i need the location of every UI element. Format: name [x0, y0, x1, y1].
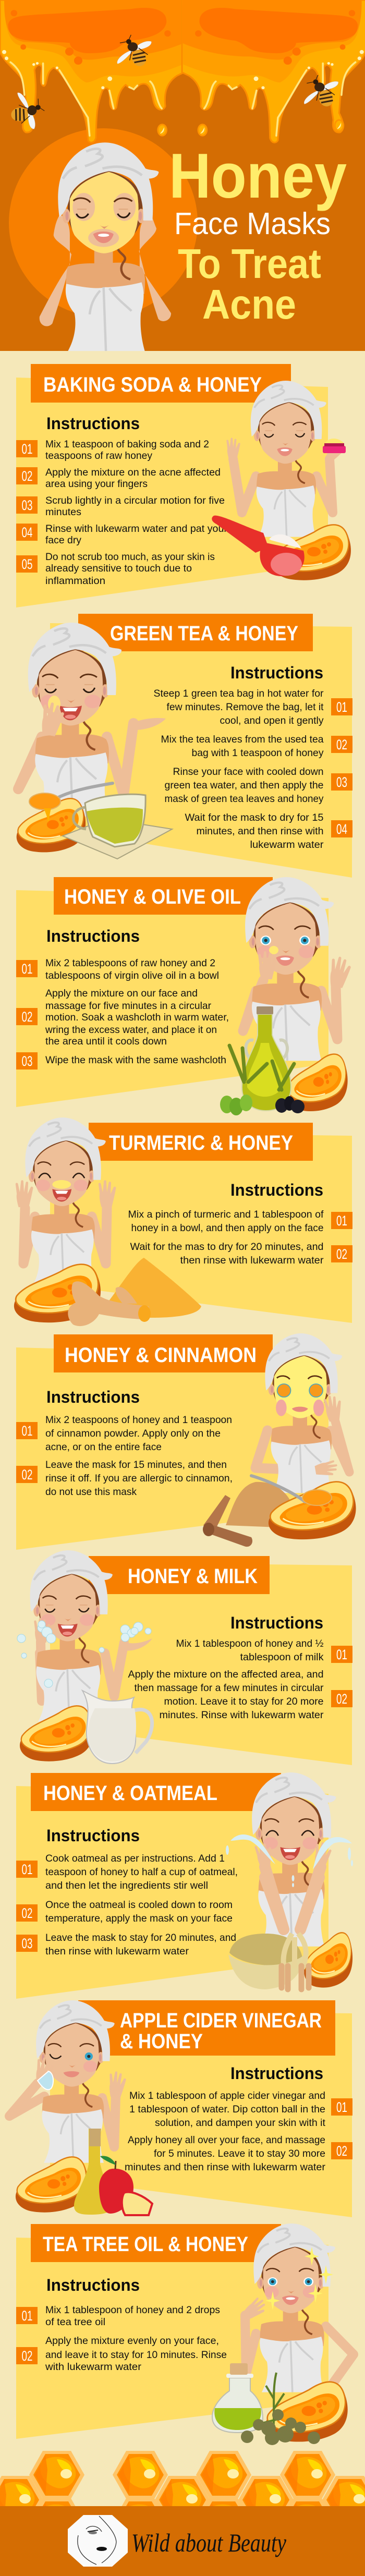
woman with orange slices on eyes	[256, 1333, 349, 1493]
instructions label: Instructions	[46, 1826, 140, 1845]
step 03	[16, 1052, 226, 1070]
step 01	[16, 1414, 232, 1453]
step 01: Mix 1 tablespoon of honey and 2 drops	[45, 2304, 220, 2316]
step 02: motion. Leave it to stay for 20 more	[164, 1696, 323, 1707]
step 02: 02	[336, 737, 347, 752]
title: Face Masks	[174, 206, 331, 241]
step 01: 1 tablespoon of water. Dip cotton ball in the	[129, 2104, 325, 2115]
oatmeal bowl and oat ears	[228, 1934, 309, 1989]
title: Acne	[202, 281, 296, 327]
vinegar bottle and apple	[74, 2129, 152, 2215]
step 04: lukewarm water	[250, 839, 324, 850]
step 02: Apply the mixture evenly on your face,	[45, 2335, 219, 2347]
step 02: 02	[22, 468, 32, 484]
instructions label: Instructions	[46, 927, 140, 945]
step 01: of cinnamon powder. Apply only on the	[45, 1428, 221, 1439]
step 03: minutes	[45, 506, 81, 518]
step 02: then rinse with lukewarm water	[180, 1255, 324, 1266]
step 02: 02	[336, 1246, 347, 1262]
step 04	[16, 523, 227, 546]
red scoop with baking soda	[212, 516, 305, 576]
olive oil bottle with olives	[220, 1006, 305, 1115]
panel: honey and milk	[17, 1550, 352, 1765]
heading: APPLE CIDER VINEGAR	[120, 2009, 322, 2032]
step 04: 04	[22, 525, 32, 540]
instructions label: Instructions	[46, 2276, 140, 2294]
step 04: minutes, and then rinse with	[196, 825, 323, 837]
honey on bread	[286, 1054, 348, 1111]
step 01	[16, 2304, 220, 2328]
heading: HONEY & OLIVE OIL	[64, 885, 241, 908]
heading: GREEN TEA & HONEY	[110, 622, 298, 645]
cinnamon powder and sticks	[203, 1482, 292, 1547]
panel: green tea and honey	[17, 614, 352, 878]
step 02: do not use this mask	[45, 1486, 137, 1498]
step 03: 03	[22, 1053, 32, 1069]
step 01	[16, 439, 209, 461]
step 01: Mix 2 tablespoons of raw honey and 2	[45, 957, 215, 969]
woman touching cheek	[243, 877, 352, 1061]
footer	[0, 2506, 365, 2576]
step 01: Mix 1 teaspoon of baking soda and 2	[45, 439, 209, 450]
step 01: Mix 1 tablespoon of apple cider vinegar and	[129, 2090, 325, 2101]
woman wiping eye with cotton pad	[9, 2000, 127, 2163]
heading: HONEY & CINNAMON	[65, 1344, 257, 1367]
step 01: honey in a bowl, and then apply on the face	[131, 1222, 323, 1234]
hero header	[0, 0, 365, 351]
woman applying honey	[18, 623, 166, 817]
step 01: 01	[336, 699, 347, 715]
step 02: 02	[22, 2348, 32, 2364]
woman splashing water	[226, 1772, 353, 1947]
step 02: minutes and then rinse with lukewarm water	[125, 2161, 326, 2173]
panel: apple cider vinegar and honey	[9, 2000, 352, 2217]
step 01: 01	[22, 1423, 32, 1439]
honey on bread	[266, 2382, 348, 2442]
step 02: then massage for a few minutes in circular	[135, 1682, 324, 1694]
step 02: Leave the mask for 15 minutes, and then	[45, 1459, 227, 1471]
honey on bread	[304, 1933, 352, 1988]
tea tree oil flask with berries	[212, 2363, 320, 2445]
step 02: 02	[22, 1905, 32, 1921]
step 02: area using your fingers	[45, 478, 148, 490]
step 01: 01	[22, 2308, 32, 2324]
panel: tea tree oil and honey	[16, 2223, 354, 2445]
step 01: 01	[336, 1213, 347, 1229]
step 01: 01	[22, 961, 32, 977]
step 01: teaspoons of raw honey	[45, 450, 152, 461]
milk jug	[82, 1691, 152, 1764]
step 01	[129, 2090, 352, 2129]
honey on bread with spoon	[251, 1476, 356, 1539]
step 03: green tea water, and then apply the	[165, 780, 323, 791]
step 01: Mix 2 teaspoons of honey and 1 teaspoon	[45, 1414, 232, 1426]
step 02: 02	[22, 1467, 32, 1483]
step 02: 02	[336, 2143, 347, 2159]
step 05: Do not scrub too much, as your skin is	[45, 551, 215, 563]
step 02	[161, 734, 352, 759]
background circle	[9, 128, 198, 317]
title: To Treat	[178, 240, 321, 287]
panel: baking soda and honey	[16, 364, 351, 607]
step 01: Mix 1 tablespoon of honey and ½	[176, 1638, 323, 1649]
step 02: for 5 minutes. Leave it to stay 30 more	[154, 2148, 325, 2159]
honey on bread	[16, 2157, 88, 2213]
step 01: solution, and dampen your skin with it	[155, 2117, 326, 2129]
step 01: cool, and open it gently	[220, 715, 324, 726]
step 02: massage for five minutes in a circular	[45, 1000, 211, 1012]
step 02	[16, 467, 221, 490]
panel: honey and oatmeal	[16, 1772, 353, 1999]
instructions label: Instructions	[46, 1388, 140, 1406]
step 04: Rinse with lukewarm water and pat your	[45, 523, 227, 534]
instructions label: Instructions	[46, 414, 140, 433]
step 03: Scrub lightly in a circular motion for five	[45, 495, 225, 506]
woman holding cream jar	[226, 381, 347, 537]
step 03: 03	[336, 774, 347, 790]
brand name: Wild about Beauty	[131, 2528, 287, 2557]
heading: TURMERIC & HONEY	[109, 1132, 293, 1155]
step 03: Leave the mask to stay for 20 minutes, and	[45, 1932, 236, 1943]
step 01	[16, 1853, 238, 1891]
step 02: Apply the mixture on the acne affected	[45, 467, 221, 478]
step 02	[16, 1899, 233, 1924]
step 01	[176, 1638, 352, 1663]
step 02: Apply the mixture on our face and	[45, 988, 198, 999]
heading: & HONEY	[120, 2030, 203, 2053]
step 03: 03	[22, 497, 32, 513]
step 05: inflammation	[45, 575, 105, 587]
title: Honey	[169, 140, 347, 211]
step 03: 03	[22, 1936, 32, 1951]
step 03	[16, 495, 225, 518]
step 02	[16, 2335, 227, 2373]
step 01: tablespoon of milk	[240, 1651, 324, 1663]
step 03: Rinse your face with cooled down	[173, 766, 323, 777]
step 05: already sensitive to touch due to	[45, 563, 192, 574]
heading: HONEY & OATMEAL	[43, 1782, 217, 1805]
step 02: Wait for the mas to dry for 20 minutes, and	[130, 1241, 323, 1253]
step 02: Apply the mixture on the affected area, and	[128, 1669, 323, 1680]
step 04: Wait for the mask to dry for 15	[185, 812, 324, 823]
step 02: Apply honey all over your face, and massage	[128, 2134, 325, 2146]
woman with foam bubbles	[17, 1550, 152, 1721]
heading: BAKING SODA & HONEY	[43, 373, 262, 396]
step 04: 04	[336, 821, 347, 837]
step 01: Cook oatmeal as per instructions. Add 1	[45, 1853, 225, 1864]
honeycomb strip	[0, 2451, 365, 2546]
step 01: teaspoon of honey to half a cup of oatmeal,	[45, 1866, 238, 1878]
step 02: Mix the tea leaves from the used tea	[161, 734, 324, 745]
step 04: face dry	[45, 534, 81, 546]
step 02	[16, 988, 229, 1047]
step 02	[128, 1669, 352, 1721]
step 02: minutes. Rinse with lukewarm water	[160, 1709, 324, 1721]
turmeric powder pile	[107, 1258, 201, 1318]
step 01	[153, 688, 352, 726]
step 02: temperature, apply the mask on your face	[45, 1913, 233, 1924]
step 01: few minutes. Remove the bag, let it	[167, 701, 324, 713]
step 02: Once the oatmeal is cooled down to room	[45, 1899, 233, 1911]
step 02: the area until it cools down	[45, 1036, 167, 1047]
heading	[120, 2009, 322, 2053]
woman with honey on nose	[16, 1117, 116, 1284]
panel: honey and olive oil	[16, 877, 352, 1115]
instructions label: Instructions	[230, 1181, 323, 1199]
step 02: 02	[336, 1691, 347, 1707]
step 05: 05	[22, 556, 32, 572]
heading: HONEY & MILK	[128, 1565, 258, 1588]
honey on bread	[273, 525, 351, 580]
dripping honey and bees	[0, 0, 365, 142]
step 03: mask of green tea leaves and honey	[165, 793, 324, 805]
woman with sparkling skin	[241, 2223, 354, 2392]
step 02: 02	[22, 1009, 32, 1025]
step 03: then rinse with lukewarm water	[45, 1946, 189, 1957]
honey on bread	[20, 1706, 93, 1761]
heading: TEA TREE OIL & HONEY	[43, 2233, 248, 2256]
step 01: tablespoons of virgin olive oil in a bowl	[45, 970, 219, 981]
woman with honey face mask	[40, 142, 171, 351]
step 02	[125, 2134, 352, 2173]
logo: line-art face	[68, 2515, 128, 2567]
step 02: motion. Soak a washcloth in warm water,	[45, 1012, 229, 1023]
step 01: 01	[22, 441, 32, 457]
honey on bread	[14, 1265, 101, 1322]
step 02: wring the excess water, and place it on	[45, 1024, 217, 1036]
step 01	[128, 1209, 352, 1234]
step 01: Mix a pinch of turmeric and 1 tablespoon of	[128, 1209, 324, 1220]
step 03	[16, 1932, 236, 1957]
step 01: Steep 1 green tea bag in hot water for	[153, 688, 324, 699]
step 02	[16, 1459, 233, 1498]
step 01	[16, 957, 219, 981]
step 01: of tea tree oil	[45, 2316, 105, 2328]
step 01: acne, or on the entire face	[45, 1441, 162, 1453]
step 02: rinse it off. If you are allergic to cinnamon,	[45, 1473, 233, 1484]
step 01: 01	[336, 2099, 347, 2115]
green tea cup on saucer	[63, 794, 172, 859]
step 03: Wipe the mask with the same washcloth	[45, 1054, 226, 1066]
step 01: and then let the ingredients stir well	[45, 1880, 208, 1891]
instructions label: Instructions	[230, 1613, 323, 1632]
step 02: bag with 1 teaspoon of honey	[192, 747, 324, 759]
step 01: 01	[336, 1647, 347, 1662]
step 03	[165, 766, 352, 805]
panel: honey and cinnamon	[16, 1333, 356, 1550]
instructions label: Instructions	[230, 663, 323, 682]
instructions label: Instructions	[230, 2064, 323, 2083]
step 04	[185, 812, 352, 850]
honey on bread	[17, 798, 86, 852]
step 02	[130, 1241, 352, 1266]
title	[169, 140, 347, 327]
honey spoon	[29, 783, 113, 823]
step 01: 01	[22, 1862, 32, 1877]
step 02: and leave it to stay for 10 minutes. Rinse	[45, 2349, 227, 2361]
panel: turmeric and honey	[14, 1117, 352, 1326]
step 02: with lukewarm water	[45, 2361, 142, 2373]
step 05	[16, 551, 215, 587]
turmeric root	[68, 1281, 151, 1326]
